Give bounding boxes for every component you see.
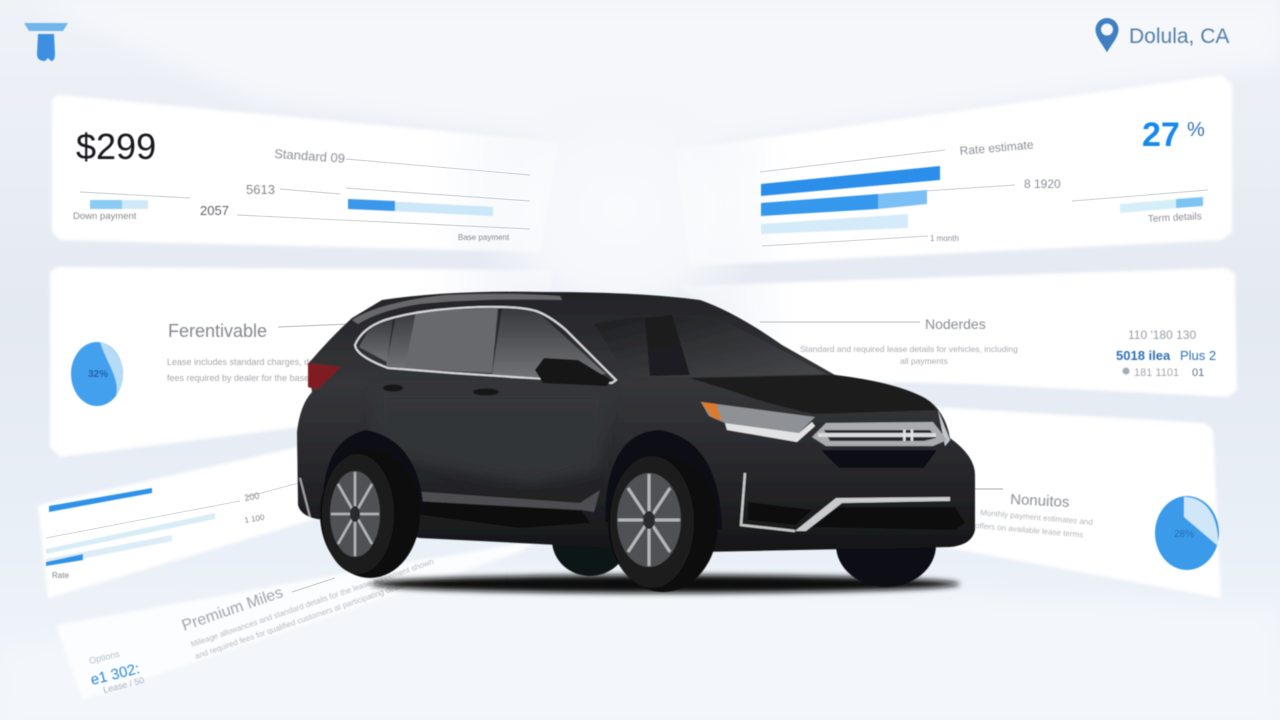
cabin pillar detail <box>645 315 690 376</box>
leader lines <box>80 159 530 229</box>
bar labels <box>930 138 1202 243</box>
description text: offers on available lease terms <box>975 521 1084 539</box>
bar labels: 8 1920 <box>1024 177 1061 191</box>
lower bumper trim <box>300 473 965 531</box>
bar: pale <box>46 513 215 554</box>
panel: top right bars <box>675 75 1232 266</box>
side mirror <box>535 358 611 386</box>
location badge <box>1096 18 1229 52</box>
value labels: Rate <box>52 571 69 580</box>
front grille: H <box>902 426 914 445</box>
panel heading: Premium Miles <box>180 584 285 635</box>
stats block: 181 1101 <box>1134 367 1179 379</box>
door panel highlight <box>374 390 610 485</box>
pie chart <box>1155 496 1219 570</box>
door handles <box>383 384 499 396</box>
description text: and required fees for qualified customers at participating dealers <box>194 578 412 661</box>
stats block: Plus 2 <box>1180 348 1216 363</box>
description text <box>975 508 1093 539</box>
leader line <box>292 578 335 592</box>
leader line <box>975 488 1003 490</box>
car body <box>297 292 975 552</box>
panel heading: Ferentivable <box>168 321 267 341</box>
windshield <box>594 317 826 378</box>
description text <box>167 357 365 383</box>
panel: middle left <box>50 267 552 457</box>
stat block: e1 302: <box>89 660 142 689</box>
bar labels: 1 month <box>930 234 959 243</box>
hood <box>690 375 937 414</box>
pie chart: 32% <box>88 369 108 380</box>
centre glow <box>470 80 770 340</box>
car <box>297 292 975 593</box>
rear wheel <box>320 450 420 578</box>
far wheels <box>552 503 936 587</box>
value labels: 5613 <box>246 182 275 197</box>
pie chart: 28% <box>1174 529 1194 540</box>
stats block: 5018 ilea <box>1116 348 1171 363</box>
leader lines <box>760 150 1208 246</box>
ground shadow <box>370 575 960 593</box>
headlight <box>701 402 950 446</box>
panel heading: Nonuitos <box>1010 491 1070 511</box>
percentage: 27 <box>1142 116 1180 154</box>
panel: top left price <box>52 95 558 252</box>
description text: Mileage allowances and standard details for the lease agreement shown <box>190 557 435 649</box>
bar: pale blue <box>761 214 908 234</box>
bar: dark blue <box>761 166 940 196</box>
bar: mid blue <box>761 190 927 216</box>
leader line <box>278 324 350 327</box>
value labels: Base payment <box>458 233 510 242</box>
stats block: 01 <box>1192 367 1204 379</box>
bar labels: Term details <box>1148 211 1202 225</box>
location text: Dolula, CA <box>1129 25 1229 48</box>
wheel arches <box>323 430 722 530</box>
leader lines <box>46 480 310 538</box>
leader line <box>760 321 920 323</box>
price: $299 <box>76 126 156 167</box>
side sill <box>397 490 600 528</box>
description text: all payments <box>900 356 948 366</box>
logo icon <box>24 23 68 61</box>
front wheel <box>608 456 718 592</box>
panel: lower right <box>930 407 1221 598</box>
description text: Monthly payment estimates and <box>980 508 1093 527</box>
description text: Standard and required lease details for vehicles, including <box>800 344 1018 354</box>
roof highlight <box>352 294 562 324</box>
value labels: Down payment <box>73 211 137 222</box>
background light wedge <box>30 0 1280 150</box>
front grille <box>812 422 947 468</box>
stats block <box>1116 328 1216 379</box>
floor glow <box>0 570 1280 720</box>
value labels <box>52 491 266 580</box>
percentage unit: % <box>1187 119 1205 141</box>
description text: fees required by dealer for the base model <box>167 373 336 383</box>
panel: lower left bars <box>38 440 345 598</box>
bar: mixed <box>46 535 172 566</box>
side windows <box>359 308 606 377</box>
value labels: 1 100 <box>244 513 266 525</box>
stat block: Lease / 50 <box>102 675 145 695</box>
small progress bar <box>90 200 148 209</box>
taillight <box>308 363 341 390</box>
window chrome trim <box>355 307 616 383</box>
stat block: Options <box>88 649 121 666</box>
value labels: 200 <box>244 491 260 503</box>
description text: Lease includes standard charges, destination and <box>167 357 365 367</box>
panel heading: Noderdes <box>925 316 986 332</box>
progress bar <box>348 199 493 216</box>
callout label: Standard 09 <box>274 146 346 166</box>
stats block: 110 '180 130 <box>1128 328 1196 342</box>
description text <box>800 344 1018 366</box>
value labels: 2057 <box>200 203 229 218</box>
panel: middle right <box>680 268 1237 397</box>
icon: map pin <box>1096 18 1118 52</box>
value labels <box>73 182 510 242</box>
bar labels: Rate estimate <box>959 138 1034 158</box>
small bar <box>1120 197 1203 213</box>
pie chart <box>71 342 123 406</box>
stat block <box>88 649 145 695</box>
panel: lower left details <box>56 540 540 700</box>
bar: blue <box>49 488 152 512</box>
